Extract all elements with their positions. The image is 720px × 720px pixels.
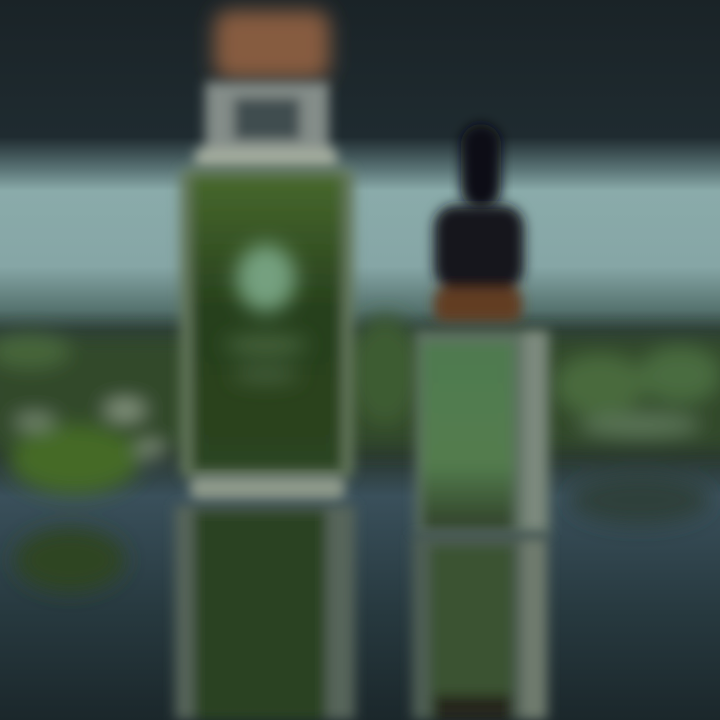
foliage band: herbs behind the bottles (0, 315, 720, 592)
dropper collar and amber shoulder (434, 205, 524, 322)
left bottle reflection (175, 505, 355, 720)
left bottle label emblem (224, 244, 308, 383)
right bottle reflection (412, 535, 548, 720)
right bottle (412, 124, 550, 720)
left bottle cork (214, 10, 330, 80)
left bottle (175, 10, 355, 720)
dropper bulb (461, 124, 501, 209)
left bottle neck (195, 82, 337, 168)
left bottle body (180, 168, 354, 478)
right bottle body (415, 330, 550, 535)
left bottle base (190, 476, 345, 500)
